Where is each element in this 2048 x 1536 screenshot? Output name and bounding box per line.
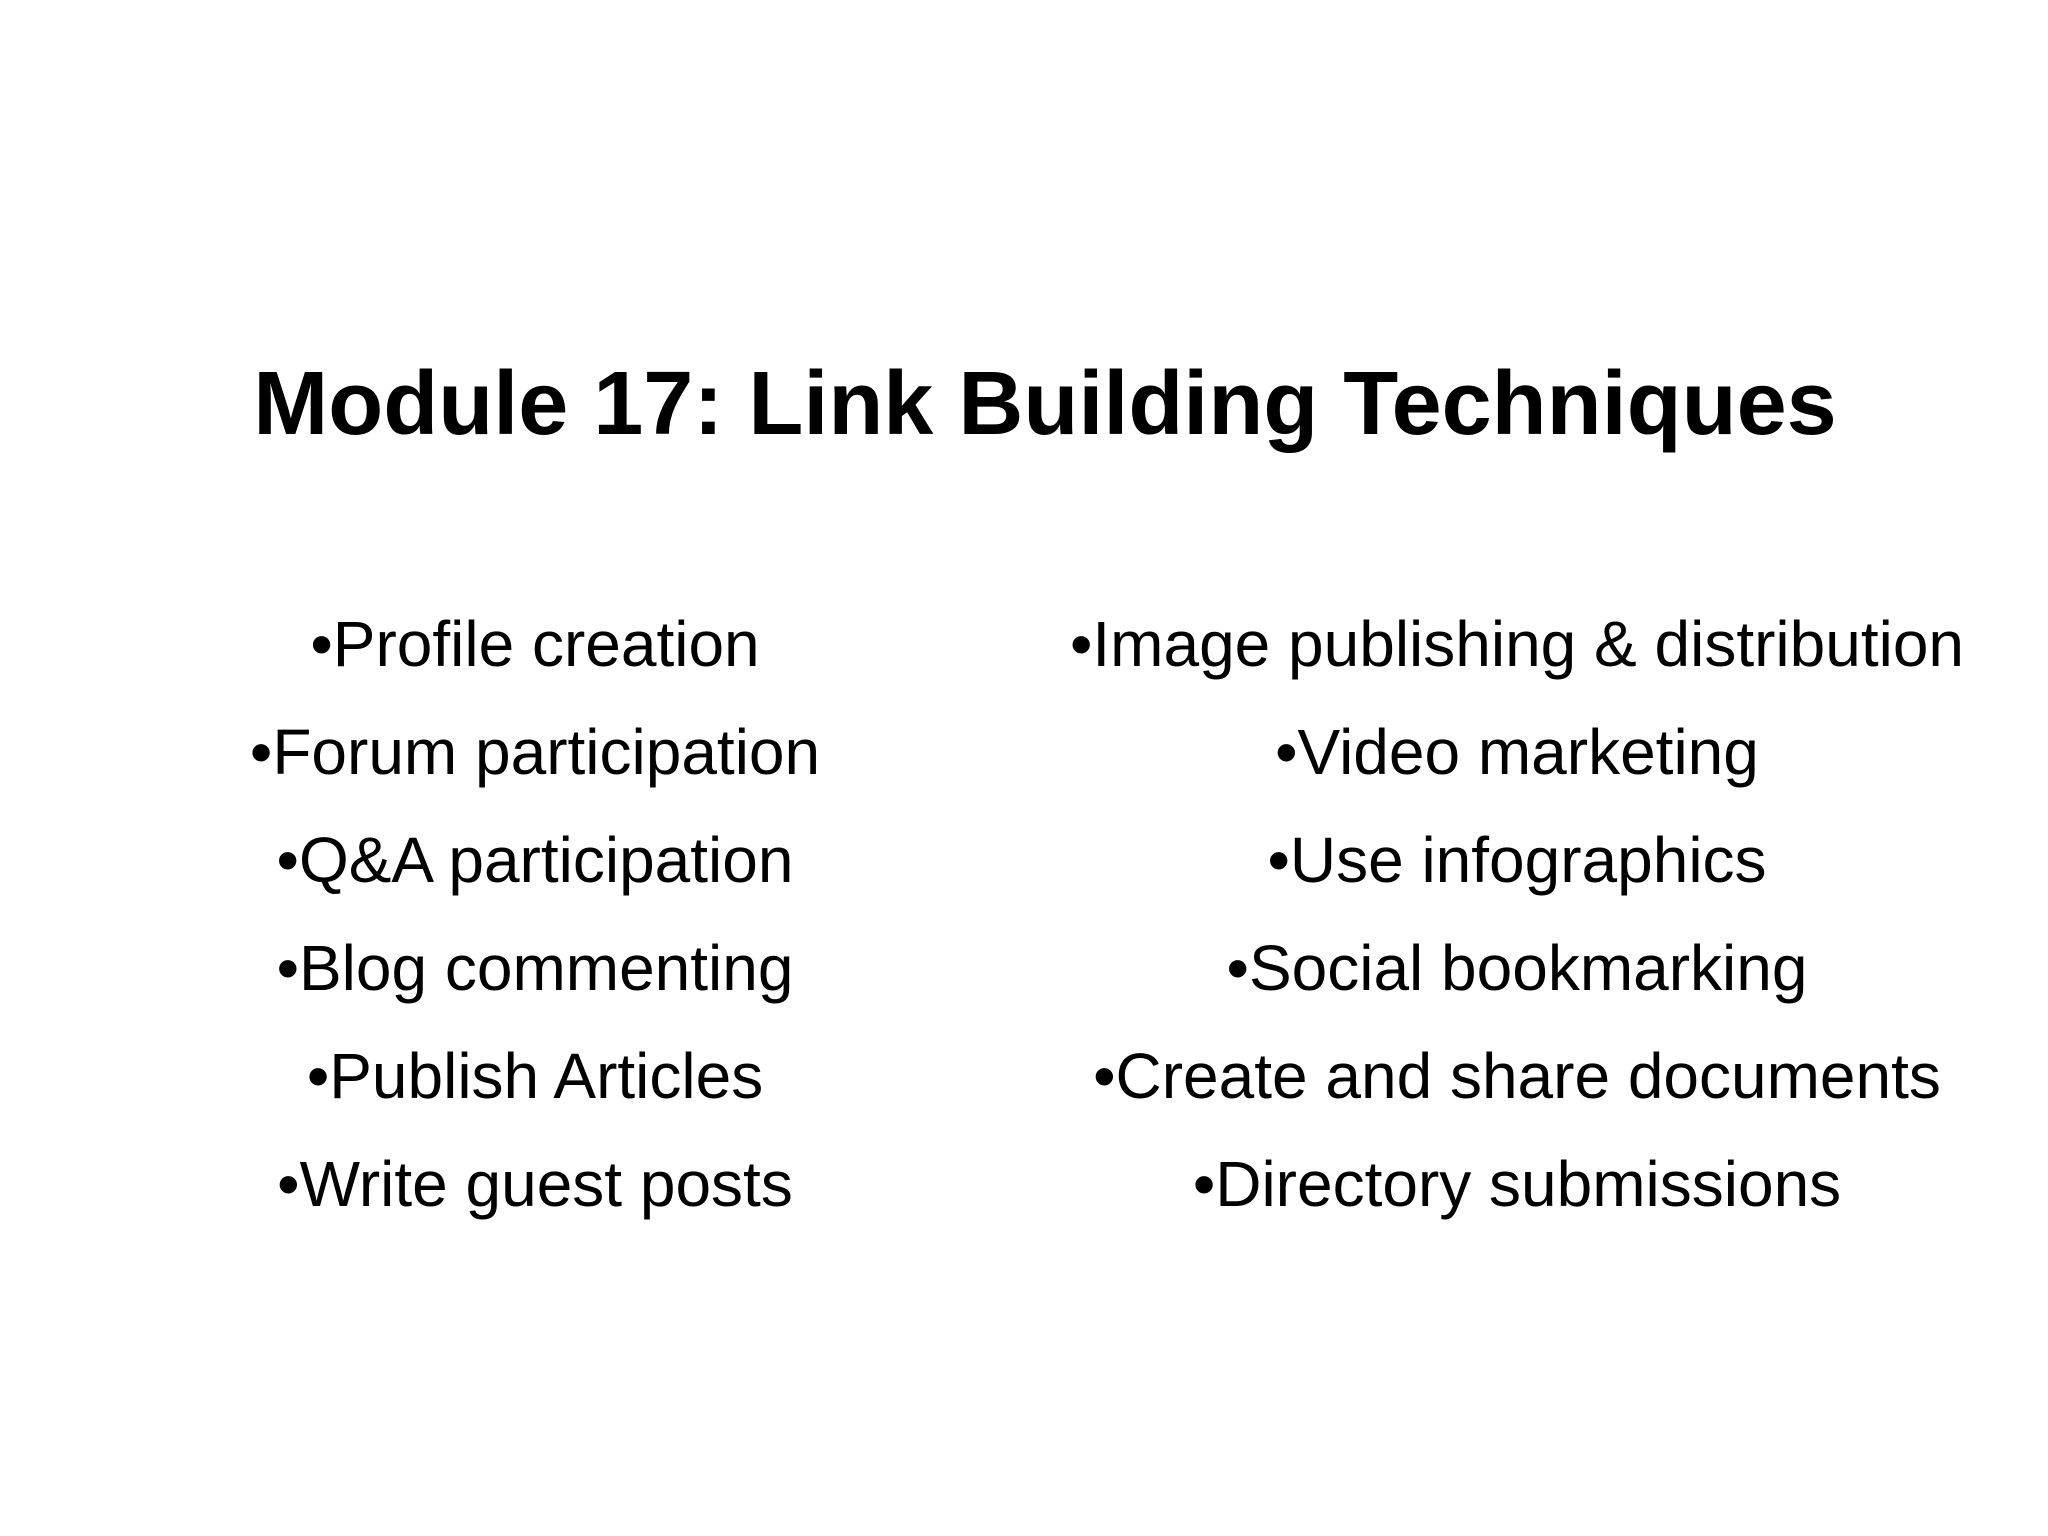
left list: •Blog commenting (277, 932, 793, 1004)
left list: •Q&A participation (277, 824, 793, 896)
left list: •Publish Articles (307, 1040, 763, 1112)
right list: •Social bookmarking (1227, 932, 1807, 1004)
right list: •Directory submissions (1193, 1148, 1841, 1220)
left list: •Profile creation (310, 608, 760, 680)
right list: •Image publishing & distribution (1070, 608, 1964, 680)
left list: •Forum participation (250, 716, 820, 788)
right list: •Video marketing (1275, 716, 1759, 788)
right list: •Use infographics (1267, 824, 1767, 896)
right list (1070, 608, 1964, 1220)
left list (250, 608, 820, 1220)
left list: •Write guest posts (277, 1148, 793, 1220)
title: Module 17: Link Building Techniques (253, 354, 1837, 454)
right list: •Create and share documents (1093, 1040, 1941, 1112)
